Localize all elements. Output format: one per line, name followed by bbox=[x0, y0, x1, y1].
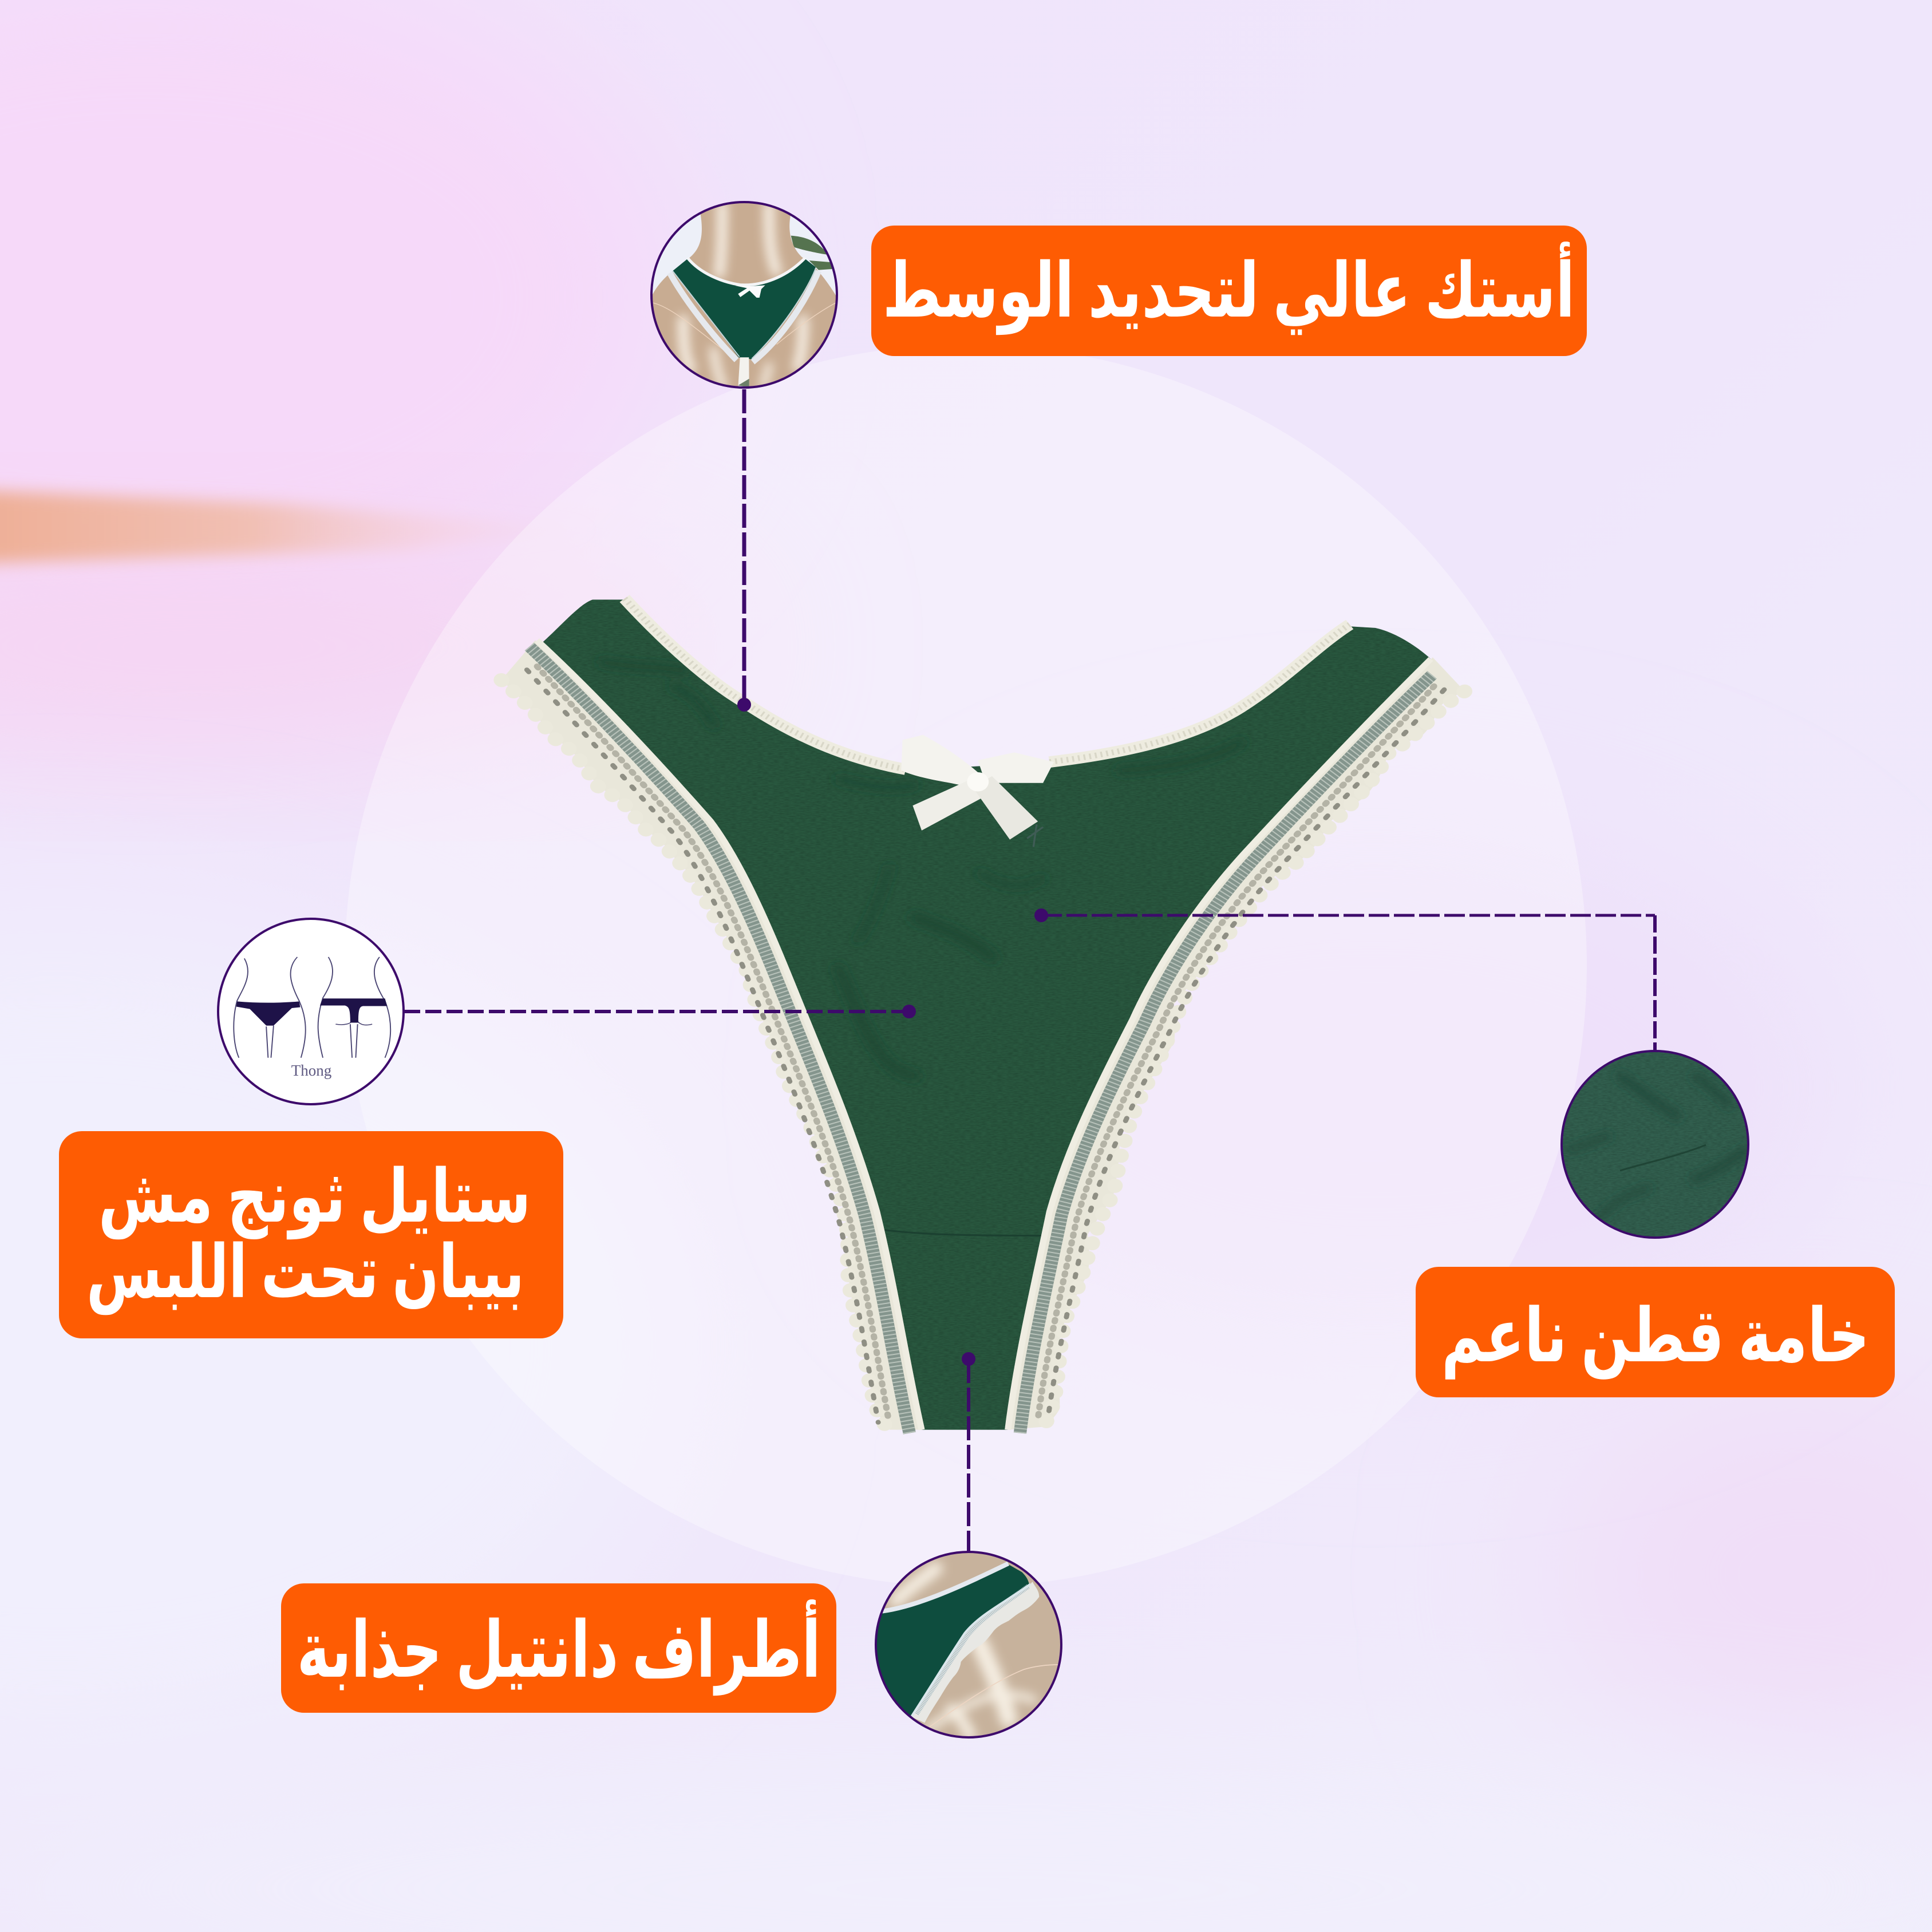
white piping along leg openings bbox=[537, 641, 1431, 1430]
label: soft cotton bbox=[1416, 1267, 1895, 1397]
connector: top feature to waistband bbox=[737, 389, 751, 712]
label: thong style: بيبان تحت اللبس bbox=[86, 1232, 524, 1313]
icon: fabric swatch bbox=[1557, 1048, 1752, 1242]
lace trim: right side bbox=[1008, 657, 1465, 1433]
connector: bottom lace detail bbox=[962, 1352, 975, 1552]
bow bbox=[901, 735, 1054, 847]
icon: thong diagram: Thong bbox=[291, 1062, 331, 1079]
label: lace edges bbox=[281, 1583, 836, 1713]
icon: thong diagram bbox=[218, 919, 404, 1104]
connector: right fabric swatch bbox=[1034, 908, 1655, 1052]
label: thong style bbox=[59, 1131, 563, 1338]
label: high waistband: أستك عالي لتحديد الوسط bbox=[883, 249, 1575, 333]
icon: top circle, garment on mannequin form bbox=[647, 197, 841, 392]
connector: left thong icon to fabric bbox=[404, 1005, 916, 1018]
label: lace edges: أطراف دانتيل جذابة bbox=[297, 1608, 820, 1694]
label: soft cotton: خامة قطن ناعم bbox=[1441, 1295, 1869, 1377]
lace trim: left side bbox=[501, 641, 922, 1433]
label: thong style: ستايل ثونج مش bbox=[98, 1156, 531, 1238]
waistband bbox=[625, 598, 1350, 769]
fabric folds bbox=[602, 662, 1241, 1076]
icon: lace edge detail bbox=[871, 1547, 1066, 1742]
large translucent circle bbox=[345, 345, 1587, 1587]
label: high waistband bbox=[871, 226, 1587, 356]
green fabric body bbox=[542, 599, 1431, 1430]
